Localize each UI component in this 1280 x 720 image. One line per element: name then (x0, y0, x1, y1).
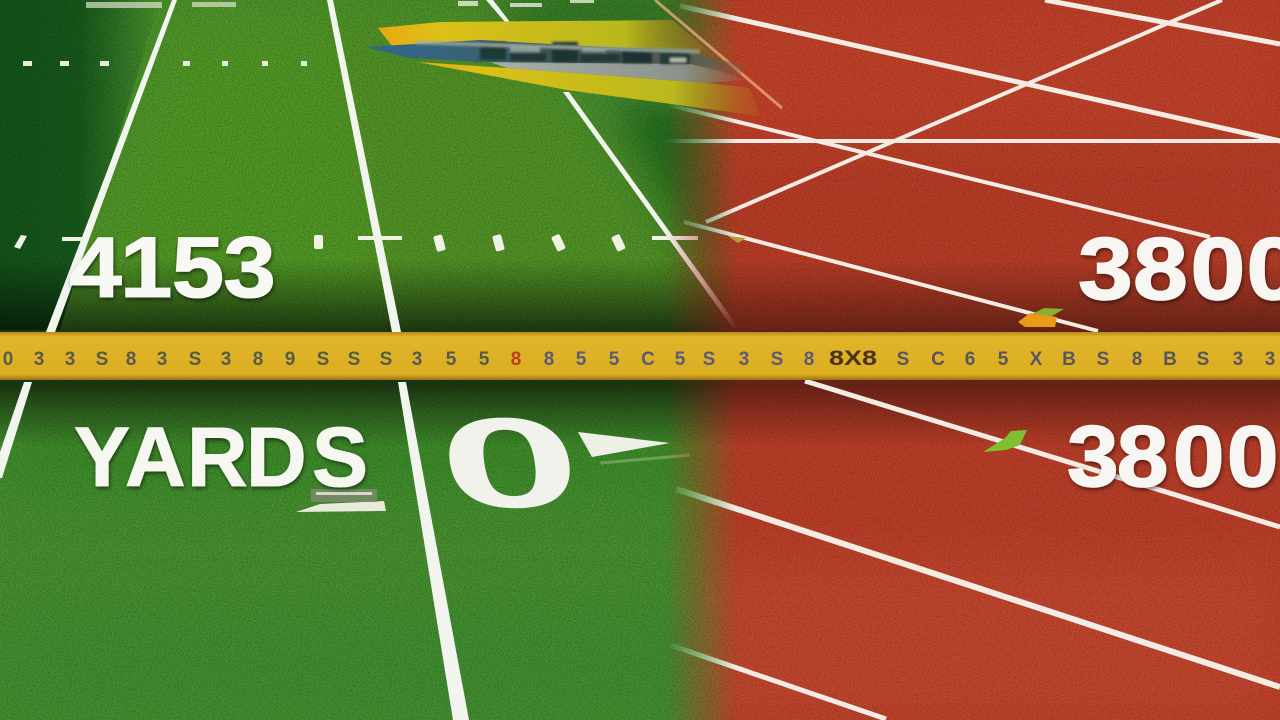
diagonal orange line across seam (655, 0, 782, 108)
small marker on seam (728, 236, 746, 243)
panel: running track (600, 0, 1280, 720)
number: 3800 bottom: 3800 (1067, 408, 1279, 504)
field arrow marking (578, 432, 690, 464)
tape marking: red: 8 (511, 349, 521, 370)
small green marker on track (983, 430, 1027, 452)
field sidelines (0, 0, 739, 720)
tape markings: right: SC65XBS8BS33 (897, 349, 1275, 370)
turf stripes (0, 0, 760, 720)
small orange marker on track (1018, 308, 1064, 327)
near yard hash marks (14, 234, 698, 252)
tape markings: 033S83S389SSS355 (3, 349, 490, 370)
stadium banner graphic (365, 20, 760, 116)
tape markings: middle: 855C5S3S8 (544, 349, 814, 370)
field number: 0 marking: O (436, 391, 583, 531)
label: YARDS: YARDS (74, 410, 368, 504)
tape center marking: 8X8 (829, 347, 877, 370)
number: 4153: 4153 (69, 220, 276, 316)
measuring tape (0, 332, 1280, 380)
far yard hash marks (23, 0, 594, 66)
track lane lines (640, 0, 1280, 719)
small plate under YARDS (296, 489, 386, 512)
